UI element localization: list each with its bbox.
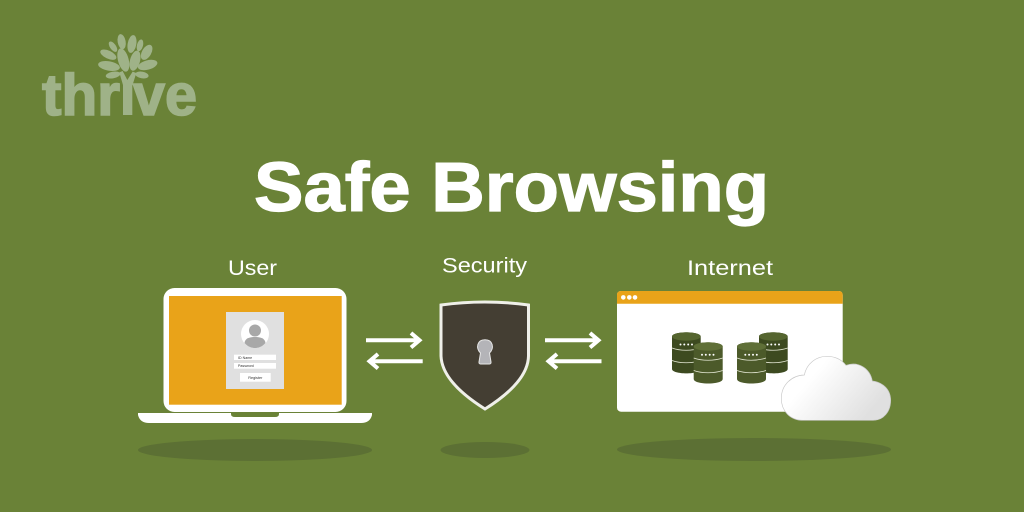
laptop lid (164, 288, 346, 412)
logo wordmark: ve (133, 63, 197, 128)
shadow: shield (440, 442, 530, 458)
browser window (617, 291, 843, 412)
database: front right (737, 342, 766, 384)
field: password: Password (238, 364, 254, 368)
database: back right (759, 332, 788, 373)
shadow: laptop (138, 439, 372, 461)
icon: security shield (441, 302, 528, 409)
logo wordmark (42, 63, 197, 128)
laptop screen (169, 296, 342, 405)
icon: laptop (138, 288, 372, 423)
database: back left (672, 332, 701, 373)
button: register: Register (248, 376, 263, 380)
laptop notch (231, 413, 279, 417)
label: Internet: Internet (687, 257, 773, 280)
database: front left (694, 342, 723, 384)
arrows: user to security (366, 333, 423, 368)
login form (226, 312, 284, 389)
laptop base (138, 413, 372, 423)
label: User: User (228, 257, 277, 280)
shadow: internet (617, 438, 891, 461)
label: Security: Security (442, 255, 528, 278)
logo tree (97, 33, 159, 115)
title: Safe Browsing (254, 148, 769, 226)
arrows: security to internet (545, 333, 602, 368)
field: ID name: ID Name (238, 356, 252, 360)
browser title bar (617, 291, 843, 304)
logo wordmark: thr (42, 63, 120, 128)
keyhole (478, 340, 492, 364)
window dots (621, 295, 637, 300)
icon: cloud (781, 356, 891, 420)
avatar (241, 320, 269, 348)
logo: thrive (42, 33, 197, 128)
